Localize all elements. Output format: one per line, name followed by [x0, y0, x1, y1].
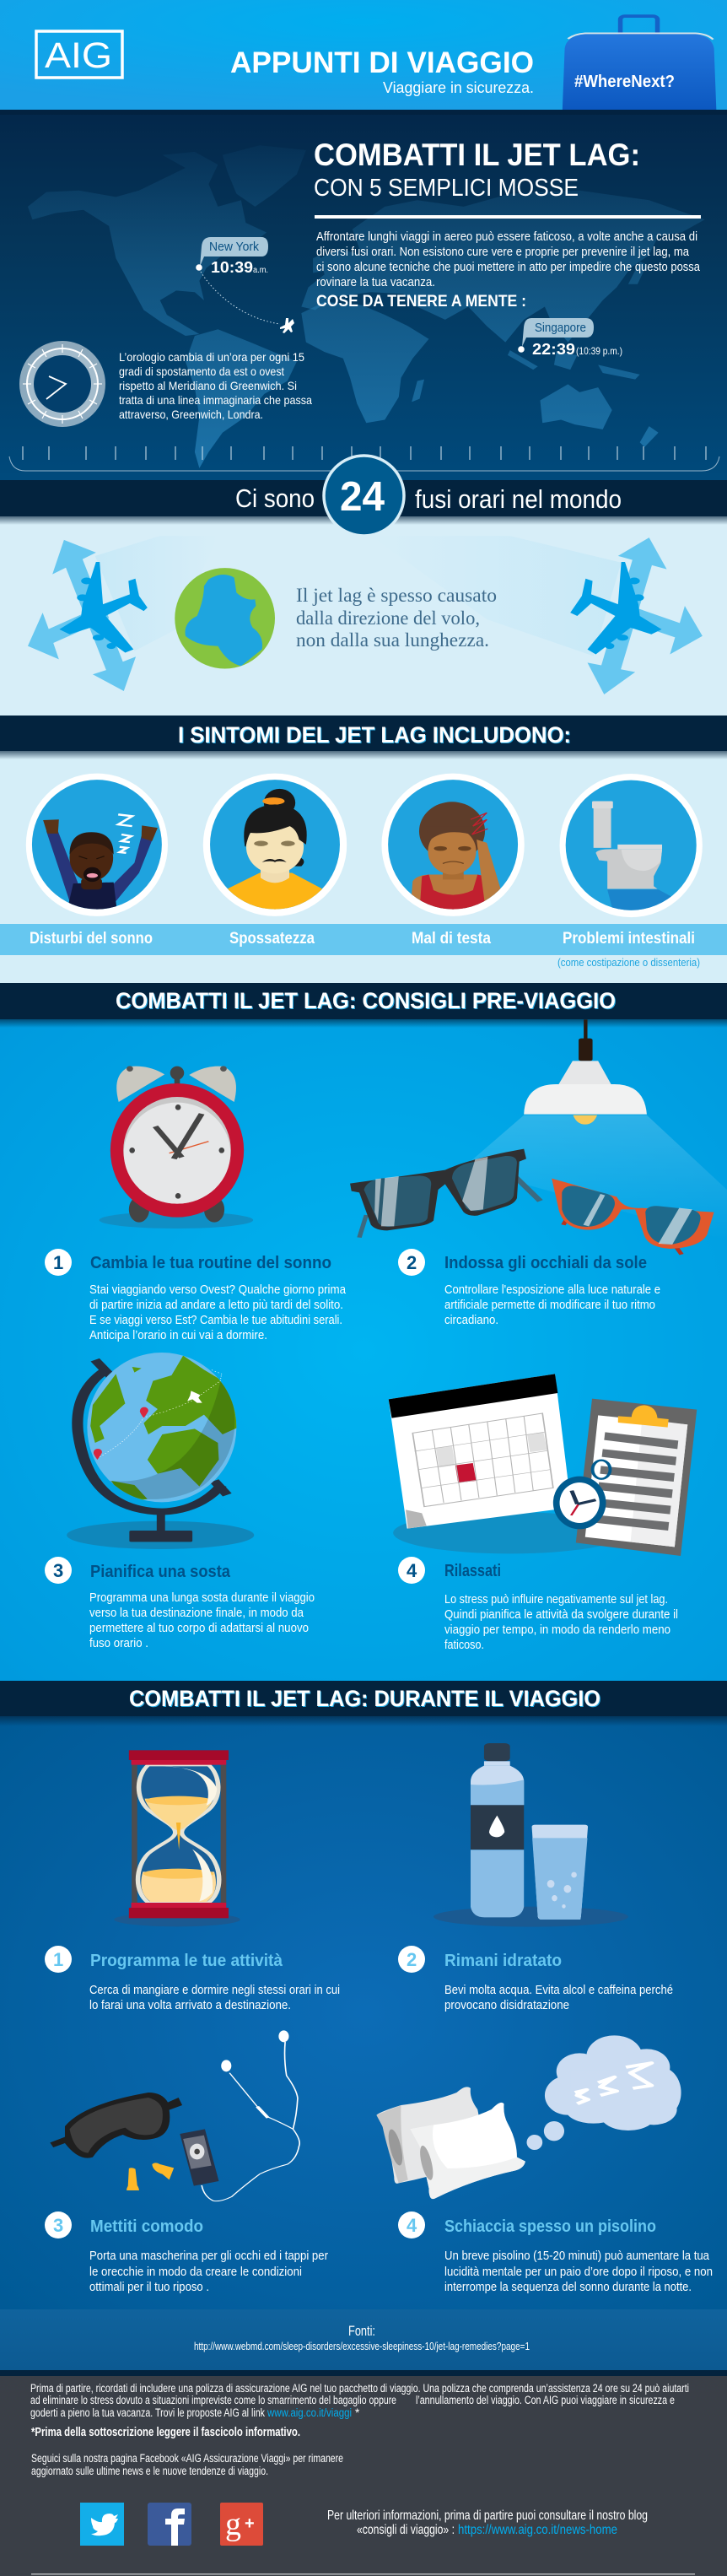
footer disclaimer: *	[355, 2406, 360, 2419]
panel: world map intro	[0, 110, 727, 480]
footer follow text: Seguici sulla nostra pagina Facebook «AIG Assicurazione Viaggi» per rimanere	[31, 2452, 343, 2465]
sources	[0, 2309, 727, 2376]
panel: symptoms	[0, 716, 727, 983]
panel: during the trip	[0, 1681, 727, 2309]
step 2: artificiale permette di modificare il tuo ritmo	[444, 1299, 655, 1312]
icon: yawning man	[26, 774, 168, 916]
icon: woman with headache	[381, 774, 525, 916]
footer	[0, 2376, 727, 2576]
step 2 during: 2	[407, 1949, 417, 1970]
clock text: attraverso, Greenwich, Londra.	[119, 408, 263, 421]
badge: 24: 24	[340, 474, 385, 520]
step 2	[398, 1249, 660, 1327]
footer disclaimer: ad eliminare lo stress dovuto a situazioni impreviste come lo smarrimento del bagaglio oppure	[30, 2394, 396, 2406]
intro text	[316, 230, 701, 289]
step 3: Pianifica una sosta	[90, 1563, 231, 1581]
callout: Singapore	[518, 318, 622, 358]
step 3 during: le orecchie in modo da creare le condizioni	[89, 2265, 302, 2279]
step 4: faticoso.	[444, 1639, 484, 1652]
step 2 during: Bevi molta acqua. Evita alcol e caffeina perché	[444, 1984, 673, 1997]
step 4: Lo stress può influire negativamente sul jet lag.	[444, 1593, 668, 1607]
AIG logo	[36, 31, 122, 78]
step 3 during: 3	[53, 2215, 63, 2236]
step 2: Controllare l'esposizione alla luce naturale e	[444, 1283, 660, 1297]
step 3: permettere al tuo corpo di adattarsi al nuovo	[89, 1622, 309, 1635]
step 1 during: Cerca di mangiare e dormire negli stessi orari in cui	[89, 1984, 340, 1997]
badge: 24	[324, 456, 404, 536]
step 3 during: Porta una mascherina per gli occhi ed i tappi per	[89, 2249, 328, 2263]
clock text: gradi di spostamento da est o ovest	[119, 365, 284, 378]
step 3: Programma una lunga sosta durante il viaggio	[89, 1591, 315, 1605]
footer disclaimer	[30, 2382, 689, 2419]
band: 24 time zones	[0, 456, 727, 536]
step 2 during	[398, 1946, 673, 2012]
icon: earth	[175, 568, 275, 669]
footer follow text: aggiornato sulle ultime news e le nuove tendenze di viaggio.	[31, 2465, 268, 2477]
AIG logo: AIG	[45, 35, 112, 76]
step 1: E se viaggi verso Est? Cambia le tue abitudini serali.	[89, 1314, 342, 1327]
footer blog text: https://www.aig.co.it/news-home	[458, 2523, 617, 2537]
step 3 during: ottimali per il tuo riposo .	[89, 2281, 209, 2294]
step 2: Indossa gli occhiali da sole	[444, 1254, 647, 1272]
step 4 during: interrompe la sequenza del sonno durante la notte.	[444, 2281, 692, 2294]
intro text: Affrontare lunghi viaggi in aereo può essere faticoso, a volte anche a causa di	[316, 230, 697, 244]
symptom footnote: (come costipazione o dissenteria)	[557, 957, 700, 969]
step 2 during: Rimani idratato	[444, 1952, 562, 1970]
icon: globe	[67, 1353, 254, 1549]
icon: toilet	[560, 774, 703, 917]
callout: New York: 10:39	[211, 259, 253, 276]
band: 24 time zones: Ci sono	[235, 483, 315, 513]
heading band: during	[0, 1681, 727, 1716]
icon: tired woman	[203, 774, 347, 916]
icon: alarm clock	[100, 1066, 253, 1229]
callout: Singapore: 22:39	[532, 341, 575, 358]
step 1 during: 1	[53, 1949, 63, 1970]
band: 24 time zones: fusi orari nel mondo	[415, 484, 622, 514]
step 2: 2	[407, 1252, 417, 1273]
time zone ruler	[9, 446, 719, 471]
step 4: viaggio per tempo, in modo da renderlo meno	[444, 1623, 670, 1637]
step 3: 3	[53, 1560, 63, 1581]
icon: right plane with arrows	[570, 537, 703, 694]
heading band: during: COMBATTI IL JET LAG: DURANTE IL VIAGGIO	[129, 1686, 600, 1711]
step 4: Rilassati	[444, 1562, 501, 1580]
flight direction text	[296, 585, 497, 651]
icon: sleep mask, earplugs, phone and earphones	[50, 2030, 299, 2201]
heading band: pre-trip: COMBATTI IL JET LAG: CONSIGLI PRE-VIAGGIO	[116, 988, 616, 1013]
header subtitle: Viaggiare in sicurezza.	[383, 79, 534, 96]
callout: New York: New York	[209, 240, 260, 254]
footer blog text: «consigli di viaggio» :	[357, 2523, 455, 2537]
clipboard	[576, 1399, 697, 1556]
flight direction text: non dalla sua lunghezza.	[296, 629, 489, 651]
symptom labels: Problemi intestinali	[563, 930, 695, 948]
icon: black sunglasses	[350, 1149, 540, 1238]
footer disclaimer: www.aig.co.it/viaggi	[267, 2406, 352, 2419]
step 1: Anticipa l’orario in cui vai a dormire.	[89, 1329, 267, 1342]
icon: clock	[19, 341, 105, 427]
step 4 during: 4	[407, 2215, 417, 2236]
symptom labels: Spossatezza	[229, 930, 315, 948]
callout: New York	[196, 237, 268, 276]
header title: APPUNTI DI VIAGGIO	[230, 46, 534, 79]
intro text: diversi fusi orari. Non esistono cure vere e proprie per prevenire il jet lag, ma	[316, 246, 690, 259]
step 3: fuso orario .	[89, 1637, 148, 1650]
icon: google plus: +	[245, 2514, 255, 2533]
icon: red sunglasses	[552, 1179, 714, 1255]
clock text: tratta di una linea immaginaria che passa	[119, 393, 312, 407]
icon: pillows	[376, 2087, 525, 2199]
header	[0, 0, 727, 110]
icon: google plus: g	[225, 2507, 241, 2542]
icon: thought cloud	[527, 2035, 681, 2150]
clock text: L’orologio cambia di un’ora per ogni 15	[119, 350, 304, 364]
symptom labels: Disturbi del sonno	[30, 930, 153, 948]
footer note: *Prima della sottoscrizione leggere il fascicolo informativo.	[31, 2426, 300, 2439]
stopwatch	[553, 1461, 610, 1529]
icon: facebook	[148, 2503, 191, 2546]
step 1: Cambia le tua routine del sonno	[90, 1254, 331, 1272]
flight direction text: dalla direzione del volo,	[296, 608, 480, 629]
subheading: COSE DA TENERE A MENTE :	[316, 293, 526, 311]
step 4: 4	[407, 1560, 417, 1581]
icon: suitcase: #WhereNext?	[574, 73, 675, 91]
step 1 during: Programma le tue attività	[90, 1952, 283, 1970]
world map	[28, 145, 705, 468]
icon: lamp	[464, 1019, 727, 1240]
heading band: symptoms: I SINTOMI DEL JET LAG INCLUDONO:	[178, 722, 571, 748]
callout: Singapore: Singapore	[535, 321, 586, 335]
heading band: symptoms	[0, 716, 727, 751]
panel: pre-trip tips	[0, 983, 727, 1681]
icon: suitcase	[563, 16, 716, 110]
step 3: verso la tua destinazione finale, in modo da	[89, 1607, 304, 1620]
main title: COMBATTI IL JET LAG:	[314, 138, 640, 172]
icon: google plus	[220, 2503, 263, 2546]
subtitle: CON 5 SEMPLICI MOSSE	[314, 175, 579, 202]
step 4	[398, 1557, 678, 1652]
step 2 during: provocano disidratazione	[444, 1999, 569, 2012]
step 3 during	[45, 2211, 328, 2294]
footer follow text	[31, 2452, 343, 2477]
step 4 during	[398, 2211, 713, 2294]
icon: left plane with arrows	[28, 540, 148, 691]
icon: plane	[280, 318, 294, 333]
callout: New York: a.m.	[253, 266, 268, 275]
footer disclaimer: goderti a pieno la tua vacanza. Trovi le proposte AIG al link	[30, 2406, 265, 2419]
callout: Singapore: (10:39 p.m.)	[576, 345, 622, 357]
clock text	[119, 350, 312, 421]
flight path	[201, 272, 280, 324]
step 4 during: Schiaccia spesso un pisolino	[444, 2217, 656, 2236]
step 1: di partire inizia ad andare a letto più tardi del solito.	[89, 1299, 343, 1312]
step 1: Stai viaggiando verso Ovest? Qualche giorno prima	[89, 1283, 347, 1297]
footer blog text	[327, 2508, 648, 2537]
step 3	[45, 1557, 315, 1650]
panel: direction of flight	[0, 516, 727, 716]
symptom labels	[0, 924, 727, 955]
icon: hourglass	[114, 1750, 240, 1926]
icon: twitter	[80, 2503, 124, 2546]
step 1	[45, 1249, 347, 1342]
clock text: rispetto al Meridiano di Greenwich. Si	[119, 379, 297, 392]
step 1 during: lo farai una volta arrivato a destinazione.	[89, 1999, 291, 2012]
intro text: rovinare la tua vacanza.	[316, 276, 435, 289]
sources: Fonti:	[348, 2323, 375, 2339]
sources: http://www.webmd.com/sleep-disorders/excessive-sleepiness-10/jet-lag-remedies?page=1	[194, 2340, 530, 2352]
step 1: 1	[53, 1252, 63, 1273]
step 1 during	[45, 1946, 340, 2012]
symptom labels: Mal di testa	[412, 930, 491, 948]
icon: water bottle and glass	[434, 1743, 628, 1927]
step 3 during: Mettiti comodo	[90, 2217, 203, 2236]
heading band: pre-trip	[0, 983, 727, 1019]
flight direction text: Il jet lag è spesso causato	[296, 585, 497, 606]
step 2: circadiano.	[444, 1314, 498, 1327]
icon: calendar, clipboard and stopwatch	[389, 1374, 697, 1556]
step 4: Quindi pianifica le attività da svolgere durante il	[444, 1608, 678, 1622]
